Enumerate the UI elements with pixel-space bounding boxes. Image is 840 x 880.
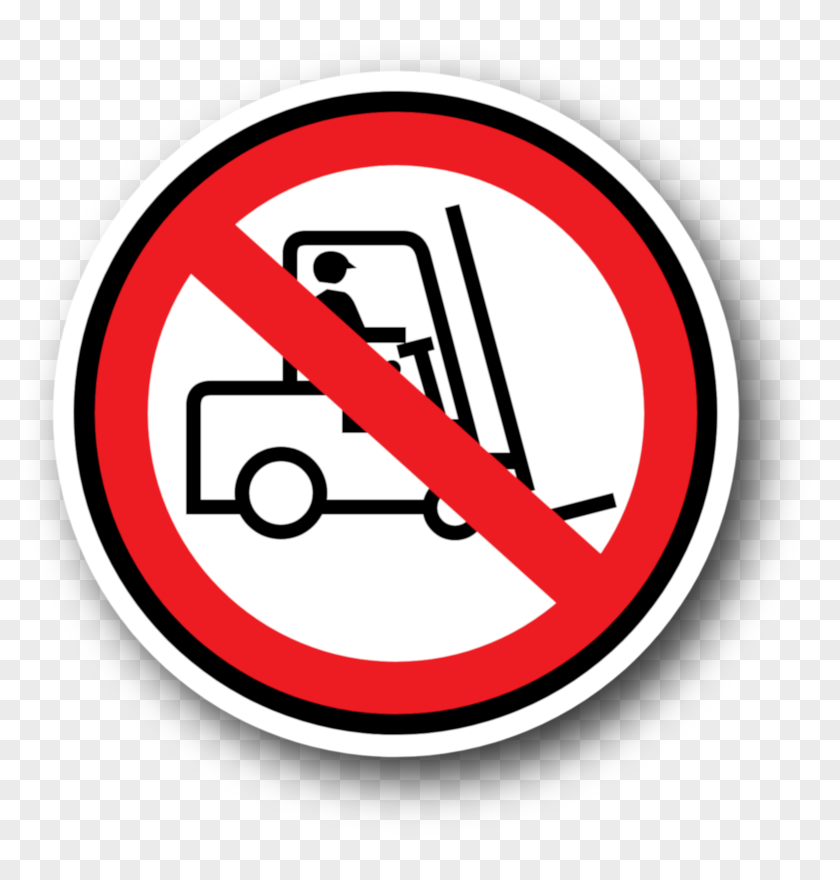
red prohibition bar: [160, 198, 630, 630]
seat block: [342, 400, 384, 433]
sign: prohibition forklift: [53, 71, 739, 757]
steering wheel: [398, 343, 433, 352]
forklift body: [194, 388, 430, 507]
white inner field: [148, 166, 644, 662]
front wheel: [430, 483, 480, 533]
icon: forklift: [194, 206, 615, 533]
drop shadow: [76, 98, 756, 778]
lower mast link: [430, 419, 470, 433]
fork: [530, 500, 615, 522]
forklift outer mast: [452, 206, 528, 492]
steering knob: [383, 360, 401, 378]
steering column: [420, 350, 441, 424]
driver torso and arm: [300, 289, 406, 343]
black ring: [74, 91, 718, 735]
fork carriage: [476, 452, 516, 470]
forklift cab and inner mast: [290, 238, 476, 458]
white outer border: [53, 71, 739, 757]
driver head and cap: [313, 251, 357, 284]
red ring: [95, 112, 697, 714]
driver: [300, 251, 406, 343]
rear wheel: [242, 454, 320, 532]
